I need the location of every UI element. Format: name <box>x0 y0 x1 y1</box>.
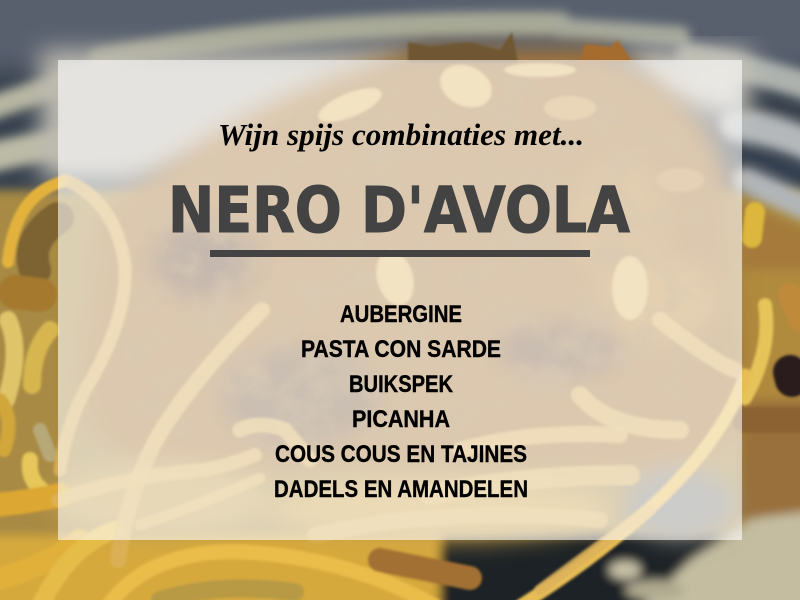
meat fragments above the panel <box>408 32 632 62</box>
item: cous cous en tajines: COUS COUS EN TAJINES <box>275 441 527 468</box>
translucent white panel <box>58 60 742 540</box>
item: aubergine: AUBERGINE <box>340 301 462 328</box>
subtitle: Wijn spijs combinaties met... <box>218 117 584 152</box>
pine nuts <box>314 56 704 320</box>
title: NERO D'AVOLA <box>168 174 630 247</box>
texture on the meat <box>110 70 720 450</box>
bright plate area behind the panel top left <box>40 50 420 180</box>
item: buikspek: BUIKSPEK <box>349 371 454 398</box>
crumbs and plate bottom right <box>0 205 800 600</box>
item: pasta con sarde: PASTA CON SARDE <box>301 336 501 363</box>
item: picanha: PICANHA <box>352 406 450 433</box>
title underline <box>210 250 590 257</box>
meat mass <box>50 50 745 540</box>
outer pasta and sauce at the left <box>0 182 470 600</box>
item: dadels en amandelen: DADELS EN AMANDELEN <box>274 476 528 503</box>
food pairing list <box>274 301 528 503</box>
right side pasta and meat <box>520 212 800 600</box>
pasta strands under the panel <box>58 180 735 590</box>
